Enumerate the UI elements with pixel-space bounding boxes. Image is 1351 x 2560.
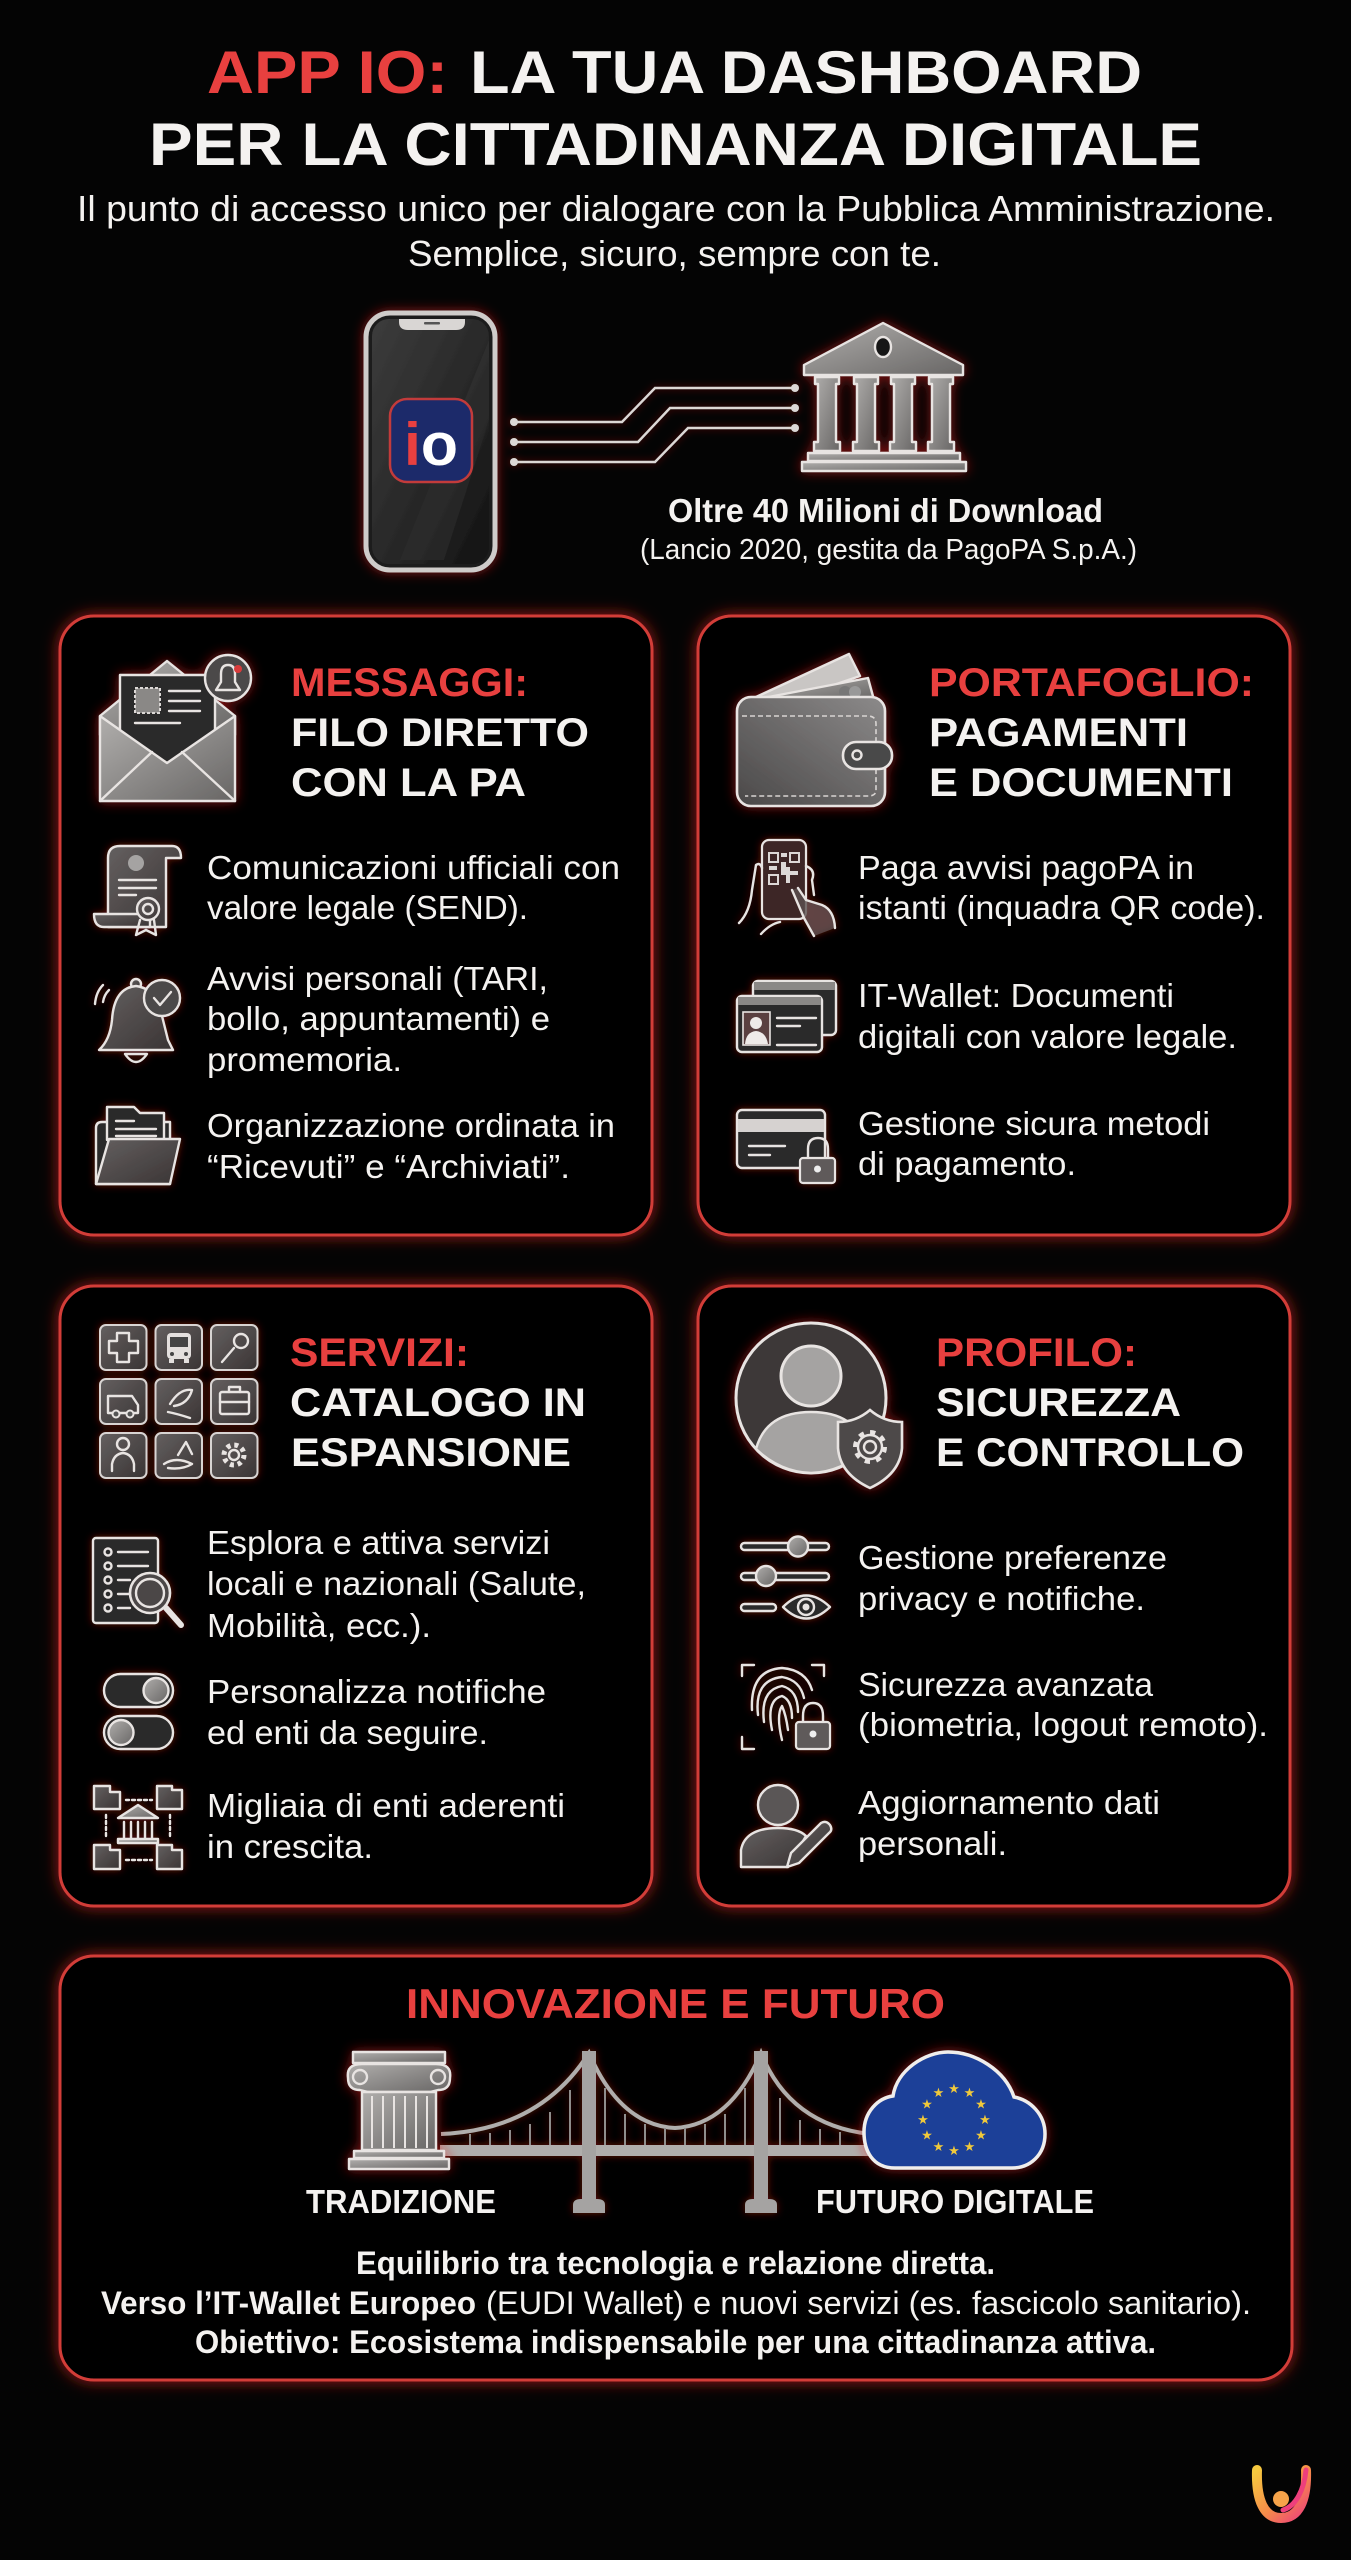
- text: comunicazioni: Comunicazioni ufficiali con: [207, 849, 620, 886]
- icon: smartphone with IO app: io: [404, 411, 458, 478]
- icon: eu cloud: ★: [933, 2139, 944, 2154]
- heading: messaggi: FILO DIRETTO: [291, 711, 589, 755]
- text: aggiornamento: Aggiornamento dati: [858, 1784, 1160, 1821]
- text: aggiornamento: personali.: [858, 1825, 1007, 1862]
- text: pagopa: istanti (inquadra QR code).: [858, 889, 1265, 926]
- text: migliaia: in crescita.: [207, 1828, 373, 1865]
- text: gestione: Gestione sicura metodi: [858, 1105, 1210, 1142]
- label: futuro digitale: FUTURO DIGITALE: [816, 2183, 1094, 2220]
- text: comunicazioni: valore legale (SEND).: [207, 889, 528, 926]
- text: esplora: [207, 1524, 586, 1644]
- panel: messaggi: [60, 616, 652, 1235]
- text: aggiornamento: [858, 1784, 1160, 1862]
- icon: bridge: [440, 2051, 870, 2213]
- text: pagopa: [858, 849, 1265, 926]
- text: personalizza: ed enti da seguire.: [207, 1714, 488, 1751]
- icon: digital id cards: [737, 981, 836, 1052]
- text: migliaia: [207, 1787, 565, 1865]
- heading: portafoglio: [929, 661, 1254, 805]
- text: innovazione summary: [101, 2245, 1251, 2360]
- heading: messaggi: [291, 661, 589, 805]
- text: organizzazione: Organizzazione ordinata in: [207, 1107, 615, 1144]
- icon: eu cloud: ★: [979, 2112, 991, 2127]
- heading: profilo: [936, 1331, 1244, 1475]
- text: sicurezza avanzata: [858, 1666, 1268, 1743]
- heading: profilo: E CONTROLLO: [936, 1431, 1244, 1475]
- heading: portafoglio: PORTAFOGLIO:: [929, 661, 1254, 705]
- icon: eu cloud: ★: [975, 2128, 987, 2142]
- icon: legal document: [94, 846, 181, 935]
- heading: servizi: SERVIZI:: [290, 1331, 469, 1375]
- icon: eu cloud: ★: [948, 2143, 960, 2158]
- text: innovazione summary: Obiettivo: Ecosistema indispensabile per una cittadinanza attiva.: [195, 2324, 1156, 2360]
- subtitle: Il punto di accesso unico per dialogare con la Pubblica Amministrazione.: [77, 188, 1275, 229]
- subtitle: [77, 188, 1275, 274]
- icon: eu cloud: ★: [921, 2128, 933, 2142]
- icon: fingerprint with lock: [742, 1665, 830, 1749]
- text: innovazione summary: (EUDI Wallet) e nuovi servizi (es. fascicolo sanitario).: [486, 2285, 1251, 2321]
- icon: eu cloud: ★: [964, 2139, 975, 2154]
- heading: servizi: CATALOGO IN: [290, 1381, 586, 1425]
- panel: portafoglio: [698, 616, 1290, 1235]
- text: gestione: di pagamento.: [858, 1145, 1076, 1182]
- text: preferenze: privacy e notifiche.: [858, 1580, 1145, 1617]
- text: preferenze: [858, 1539, 1167, 1617]
- heading: messaggi: MESSAGGI:: [291, 661, 528, 705]
- icon: profile with shield: [736, 1323, 902, 1488]
- icon: eu cloud: ★: [921, 2096, 933, 2112]
- heading: innovazione e futuro: INNOVAZIONE E FUTURO: [406, 1980, 945, 2027]
- text: organizzazione: “Ricevuti” e “Archiviati”.: [207, 1148, 570, 1185]
- text: innovazione summary: Verso l’IT-Wallet Europeo: [101, 2285, 476, 2321]
- icon: corner logo: [1257, 2470, 1306, 2518]
- text: esplora: Esplora e attiva servizi: [207, 1524, 550, 1561]
- text: gestione: [858, 1105, 1210, 1182]
- icon: eu cloud: [864, 2052, 1045, 2168]
- text: personalizza: [207, 1673, 546, 1751]
- panel: servizi: [60, 1286, 652, 1906]
- download stat: (Lancio 2020, gestita da PagoPA S.p.A.): [640, 534, 1137, 566]
- text: sicurezza avanzata: Sicurezza avanzata: [858, 1666, 1154, 1703]
- label: tradizione: TRADIZIONE: [306, 2183, 496, 2220]
- heading: servizi: ESPANSIONE: [291, 1431, 571, 1475]
- panel: profilo: [698, 1286, 1290, 1906]
- text: esplora: locali e nazionali (Salute,: [207, 1565, 586, 1602]
- text: esplora: Mobilità, ecc.).: [207, 1607, 431, 1644]
- title: LA TUA DASHBOARD: [470, 39, 1142, 106]
- title: APP IO:: [207, 39, 448, 106]
- panel: innovazione e futuro: [60, 1956, 1292, 2380]
- heading: portafoglio: E DOCUMENTI: [929, 761, 1233, 805]
- icon: services grid: [100, 1325, 258, 1478]
- icon: bell with check: [95, 979, 180, 1062]
- icon: list with magnifier: [93, 1538, 181, 1625]
- icon: eu cloud: ★: [933, 2085, 944, 2100]
- heading: profilo: SICUREZZA: [936, 1381, 1181, 1425]
- text: it-wallet: [858, 977, 1237, 1055]
- text: avvisi: bollo, appuntamenti) e: [207, 1000, 550, 1037]
- download stat: [640, 492, 1137, 566]
- icon: classical column: [348, 2052, 450, 2169]
- icon: eu cloud: ★: [964, 2085, 975, 2100]
- text: comunicazioni: [207, 849, 620, 926]
- icon: wallet: [737, 654, 892, 806]
- text: preferenze: Gestione preferenze: [858, 1539, 1167, 1576]
- icon: eu cloud: ★: [948, 2081, 960, 2096]
- icon: envelope with notification: [100, 655, 251, 801]
- connection lines phone to institution: [510, 384, 799, 466]
- icon: network of institutions: [94, 1786, 182, 1869]
- text: innovazione summary: Equilibrio tra tecnologia e relazione diretta.: [356, 2245, 995, 2281]
- download stat: Oltre 40 Milioni di Download: [668, 492, 1103, 529]
- subtitle: Semplice, sicuro, sempre con te.: [408, 233, 941, 274]
- icon: smartphone with IO app: [366, 313, 495, 570]
- heading: messaggi: CON LA PA: [291, 761, 526, 805]
- icon: card with lock: [737, 1110, 835, 1183]
- text: organizzazione: [207, 1107, 615, 1185]
- text: sicurezza avanzata: (biometria, logout remoto).: [858, 1706, 1268, 1743]
- heading: profilo: PROFILO:: [936, 1331, 1137, 1375]
- text: avvisi: Avvisi personali (TARI,: [207, 960, 548, 997]
- icon: qr code payment: [739, 840, 835, 936]
- icon: eu cloud: ★: [975, 2096, 987, 2112]
- icon: eu cloud: ★: [917, 2112, 929, 2127]
- text: pagopa: Paga avvisi pagoPA in: [858, 849, 1194, 886]
- text: migliaia: Migliaia di enti aderenti: [207, 1787, 565, 1824]
- text: it-wallet: digitali con valore legale.: [858, 1018, 1237, 1055]
- icon: folder: [96, 1107, 180, 1184]
- title: [149, 39, 1202, 178]
- text: avvisi: promemoria.: [207, 1041, 402, 1078]
- title: PER LA CITTADINANZA DIGITALE: [149, 111, 1202, 178]
- heading: servizi: [290, 1331, 586, 1475]
- heading: portafoglio: PAGAMENTI: [929, 711, 1188, 755]
- icon: toggles: [104, 1674, 173, 1749]
- text: personalizza: Personalizza notifiche: [207, 1673, 546, 1710]
- text: avvisi: [207, 960, 550, 1078]
- icon: user with pencil: [741, 1785, 831, 1867]
- icon: privacy sliders: [741, 1536, 830, 1618]
- icon: public institution building: [802, 323, 966, 471]
- text: it-wallet: IT-Wallet: Documenti: [858, 977, 1174, 1014]
